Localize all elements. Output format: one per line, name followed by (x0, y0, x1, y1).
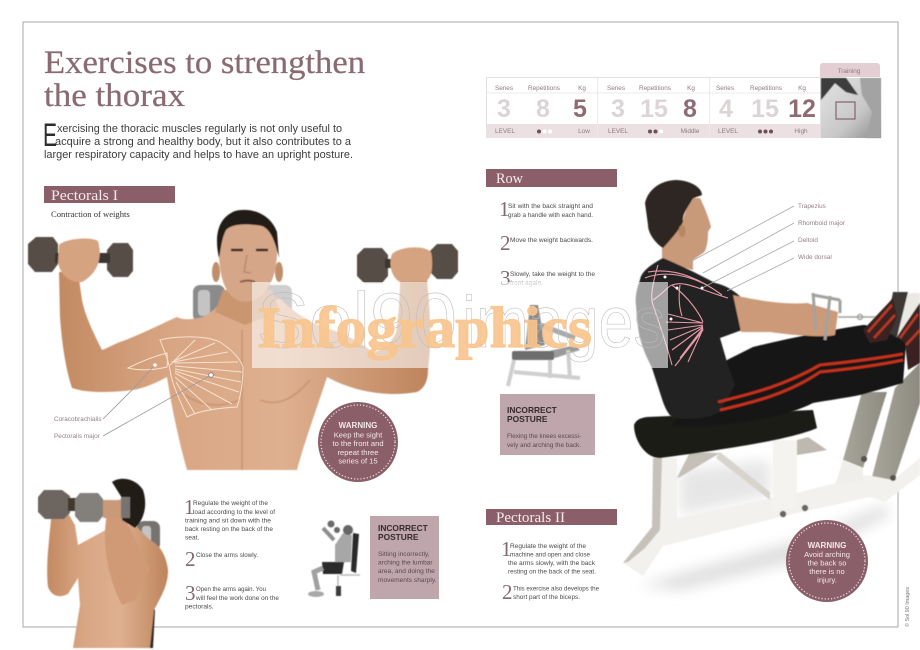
steps: Pectorals I: back resting on the back of the (185, 526, 273, 533)
steps: Pectorals I: training and sit down with the (185, 518, 271, 524)
heading: Pectorals II (486, 509, 617, 526)
title: Exercises to strengthen (44, 45, 365, 81)
heading: Pectorals II: Pectorals II (496, 510, 565, 526)
level 1 low: LEVEL (495, 128, 515, 135)
callout: incorrect posture 2: Flexing the knees excessi- (507, 433, 581, 440)
copyright: © Sol 90 Images (904, 587, 911, 627)
level 2 middle: Series (607, 85, 625, 92)
intro text: acquire a strong and healthy body, but it also contributes to a (55, 136, 352, 148)
torso and arms (47, 500, 168, 648)
steps: Pectorals II (501, 537, 599, 604)
subheading: Contraction of weights (51, 209, 130, 219)
left dumbbell (28, 237, 133, 277)
red stripes (718, 354, 903, 402)
handle and cable (813, 293, 895, 340)
watermark text (257, 276, 665, 364)
callout: incorrect posture 2: vely and arching the back. (507, 442, 581, 449)
muscle labels: Deltoid (798, 237, 818, 244)
steps: Row: Slowly, take the weight to the (510, 271, 595, 278)
muscle labels: Wide dorsal (798, 254, 832, 261)
callout: incorrect posture 2 (500, 394, 595, 455)
hands (58, 238, 432, 282)
level 1 low: Kg (578, 85, 586, 92)
steps: Pectorals I: load according to the level of (193, 509, 275, 516)
small figure: incorrect row posture (508, 305, 580, 386)
steps: Row: 3 (500, 266, 510, 290)
intro text: xercising the thoracic muscles regularly is not only useful to (57, 123, 342, 135)
steps: Pectorals I: pectorals. (185, 604, 214, 610)
torso and arms (59, 272, 430, 470)
muscle overlay: pectoralis (128, 337, 243, 417)
warning badge 2: Avoid arching (804, 550, 850, 559)
steps: Pectorals II: 2 (502, 580, 512, 604)
warning badge 2: injury. (817, 576, 837, 584)
small figure: incorrect seated posture (308, 520, 360, 597)
seat (634, 410, 817, 458)
steps: Pectorals II: resting on the back of the seat. (508, 568, 596, 576)
level 3 high: Series (716, 85, 734, 92)
callout: incorrect posture 1: Sitting incorrectly, (378, 551, 430, 558)
chest shading (185, 330, 310, 470)
callout: incorrect posture 1: arching the lumbar (378, 560, 433, 566)
level 2 middle: 3 (611, 95, 625, 123)
level 3 high (716, 85, 816, 135)
level 2 middle: Kg (687, 85, 695, 92)
steps: Pectorals I: will feel the work done on the (195, 595, 279, 602)
figure: man with dumbbell at chest (38, 479, 168, 648)
shirt (636, 258, 746, 419)
warning badge 2: the back so (808, 558, 846, 568)
dumbbell (38, 490, 130, 522)
headrest and seat pad (137, 521, 160, 648)
training tab and thumbnail: Training (838, 68, 861, 75)
floor shadow (640, 505, 890, 590)
steps: Row (499, 197, 595, 290)
man rowing (636, 180, 920, 426)
watermark text: images (462, 283, 665, 363)
warning badge 2 (786, 520, 868, 602)
level 1 low: Series (495, 85, 513, 92)
steps: Pectorals I: Regulate the weight of the (193, 500, 268, 507)
warning badge 1 (318, 402, 398, 482)
intro text: E (43, 117, 57, 153)
muscle labels (54, 363, 213, 440)
level 2 middle: Middle (681, 128, 700, 135)
arm (733, 295, 838, 336)
level 1 low: Low (578, 128, 590, 135)
callout: incorrect posture 2: INCORRECT (507, 405, 558, 415)
watermark panel (252, 282, 668, 368)
pillars (843, 292, 920, 487)
muscle overlay: back (645, 265, 728, 366)
head hair (112, 479, 145, 528)
level 2 middle: LEVEL (608, 128, 628, 135)
callout: incorrect posture 1 (370, 516, 439, 599)
level 1 low: 3 (497, 95, 511, 123)
head (212, 210, 283, 325)
level 3 high: 15 (751, 95, 779, 123)
shadow between bench legs (680, 460, 770, 515)
warning badge 1: Keep the sight (334, 430, 383, 440)
steps: Pectorals I (184, 495, 279, 610)
watermark text: Sol90 (257, 276, 457, 364)
heading: Row (486, 169, 617, 187)
title (44, 45, 365, 114)
level 3 high: Kg (798, 85, 806, 92)
right dumbbell (357, 244, 458, 283)
heading: Row: Row (496, 171, 523, 187)
callout: incorrect posture 1: movements sharply. (378, 577, 437, 584)
figure: row machine (623, 180, 920, 590)
warning badge 1: WARNING (339, 421, 377, 430)
shoes (863, 298, 897, 343)
watermark text: Infographics (257, 295, 592, 360)
title: the thorax (44, 78, 186, 114)
steps: Pectorals I: 1 (184, 495, 194, 519)
heading: Pectorals I: Pectorals I (51, 188, 118, 204)
level 1 low: 8 (536, 95, 550, 123)
panel: training levels table (486, 78, 820, 138)
steps: Pectorals II: the arms slowly, with the back (508, 560, 596, 567)
muscle labels (664, 203, 846, 320)
level 1 low: 5 (573, 95, 587, 123)
headrest (193, 285, 292, 322)
warning badge 1: series of 15 (338, 456, 378, 466)
pants (672, 325, 906, 426)
steps: Pectorals I: Close the arms slowly. (196, 552, 258, 559)
level 3 high: Repetitions (750, 85, 782, 92)
level 3 high: High (794, 128, 808, 135)
level 2 middle: Repetitions (639, 85, 671, 92)
muscle labels: Trapezius (798, 203, 826, 210)
muscle labels: Coracobrachialis (54, 416, 102, 423)
steps: Pectorals II: short part of the biceps. (513, 594, 580, 601)
level 1 low: Repetitions (528, 85, 560, 92)
callout: incorrect posture 1: POSTURE (378, 532, 419, 542)
level 2 middle (607, 85, 700, 135)
level 1 low (495, 85, 590, 135)
steps: Row: 1 (499, 197, 510, 221)
callout: incorrect posture 1: INCORRECT (378, 523, 429, 533)
steps: Pectorals II: This exercise also develops the (513, 586, 599, 592)
callout: incorrect posture 1: area, and doing the (378, 568, 435, 575)
figure: man lifting dumbbells (28, 210, 458, 470)
ear (678, 225, 686, 237)
steps: Row: front again. (510, 280, 543, 287)
warning badge 2: WARNING (808, 541, 846, 550)
level 3 high: LEVEL (718, 128, 738, 135)
muscle labels: Rhomboid major (798, 220, 846, 227)
level 2 middle: 15 (640, 95, 668, 123)
steps: Pectorals I: Open the arms again. You (196, 586, 266, 593)
frame (623, 437, 920, 576)
intro text (43, 117, 353, 161)
steps: Row: 2 (500, 231, 510, 255)
heading: Pectorals I (44, 186, 175, 204)
steps: Pectorals I: seat. (185, 534, 199, 542)
warning badge 2: there is no (809, 567, 845, 576)
steps: Pectorals II: 1 (501, 537, 512, 561)
steps: Row: Sit with the back straight and (508, 203, 593, 210)
level 2 middle: 8 (683, 95, 697, 123)
training tab and thumbnail (820, 63, 881, 138)
level 3 high: 4 (719, 95, 733, 123)
hair (645, 180, 702, 248)
steps: Pectorals I: 2 (185, 547, 196, 571)
raised forearm (105, 500, 150, 605)
neck and head (662, 198, 711, 270)
muscle labels: Pectoralis major (54, 433, 101, 440)
warning badge 1: to the front and (332, 439, 384, 448)
steps: Pectorals I: 3 (185, 581, 196, 605)
callout: incorrect posture 2: POSTURE (507, 414, 548, 424)
steps: Pectorals II: machine and open and close (510, 552, 590, 558)
steps: Pectorals II: Regulate the weight of the (510, 543, 586, 550)
intro text: larger respiratory capacity and helps to have an upright posture. (44, 149, 353, 161)
level 3 high: 12 (788, 95, 816, 123)
steps: Row: grab a handle with each hand. (508, 212, 593, 219)
warning badge 1: repeat three (338, 448, 378, 457)
steps: Row: Move the weight backwards. (510, 237, 593, 244)
